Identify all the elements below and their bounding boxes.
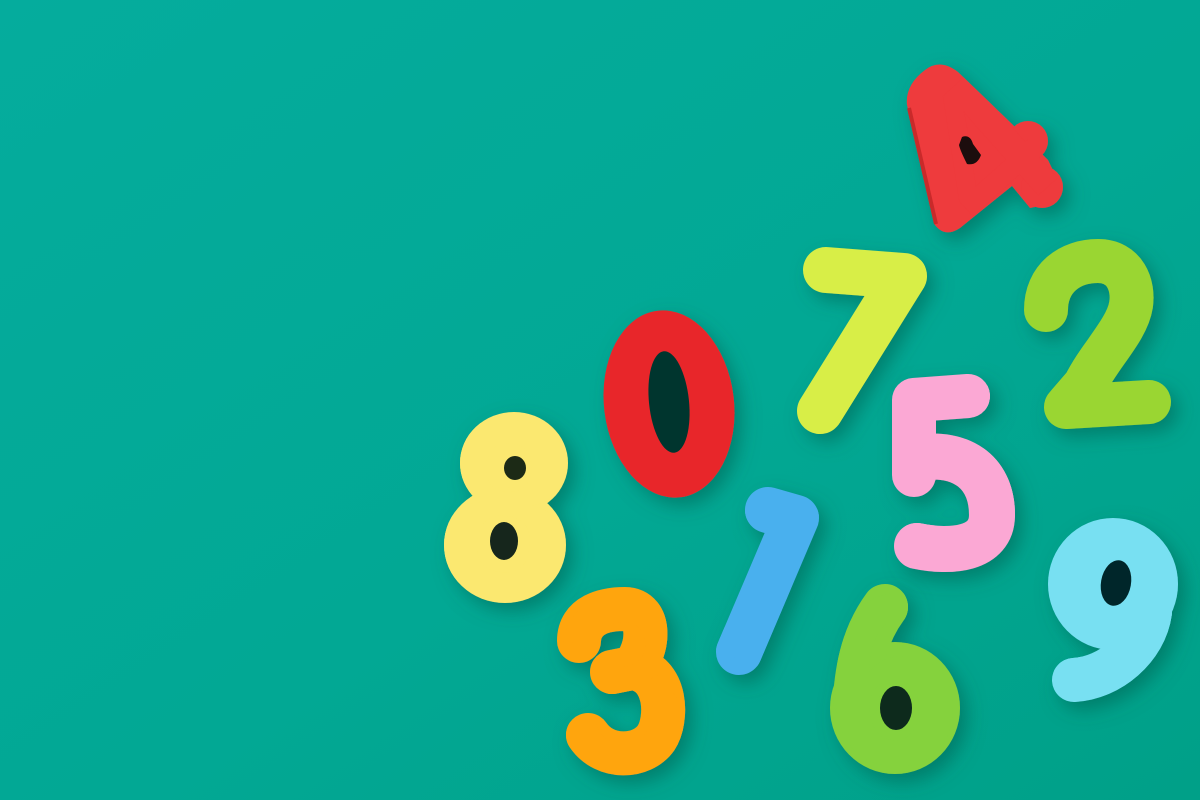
number 4, red: 4 xyxy=(869,31,1101,271)
number 1, blue: 1 xyxy=(657,428,883,732)
number 2, green xyxy=(1024,239,1183,443)
illustration: coloured toy numbers on a teal background xyxy=(442,64,1200,800)
number 5, pink xyxy=(891,374,1028,586)
number 9, light blue xyxy=(1048,518,1191,716)
number 8, yellow: 8 xyxy=(427,363,585,652)
number 0, red: 0 xyxy=(585,262,754,550)
number 1, blue xyxy=(716,487,832,688)
number 8, yellow xyxy=(444,412,582,618)
number 0, red xyxy=(603,310,749,512)
number 2, green: 2 xyxy=(1014,190,1182,478)
number 7, yellow-green xyxy=(797,247,940,448)
number 7, yellow-green: 7 xyxy=(789,201,939,481)
number 5, pink: 5 xyxy=(870,330,1034,616)
number 4, red xyxy=(906,64,1076,246)
